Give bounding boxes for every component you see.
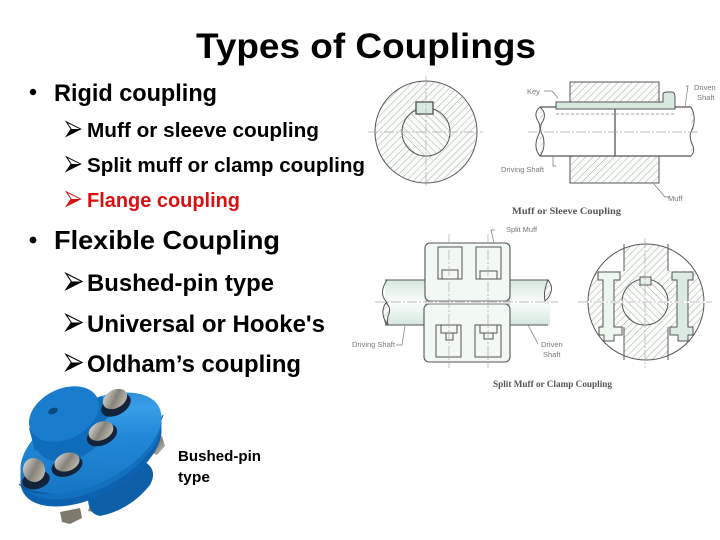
label: driven shaft: Driven: [541, 340, 563, 349]
photo label: bushed-pin type: [178, 449, 261, 486]
label: key: Key: [527, 87, 540, 96]
diagram: split muff or clamp coupling: [352, 225, 712, 390]
label: driving shaft: Driving Shaft: [501, 165, 545, 174]
title: Types of Couplings: [196, 26, 536, 66]
label: driven shaft: Shaft: [543, 350, 561, 359]
list item: oldham's coupling: Oldham’s coupling: [87, 351, 301, 378]
list item: universal or hooke's: Universal or Hooke's: [87, 311, 325, 338]
label: driven shaft: Shaft: [697, 93, 715, 102]
label: split muff: Split Muff: [506, 225, 538, 234]
caption: split muff or clamp coupling: Split Muff or Clamp Coupling: [493, 380, 612, 390]
photo label: bushed-pin type: Bushed-pin: [178, 449, 261, 465]
lower hub: [88, 462, 153, 516]
heading: rigid coupling: Rigid coupling: [54, 81, 217, 107]
side view: [375, 234, 558, 368]
text block: coupling types: [30, 81, 365, 378]
list item: bushed-pin type: Bushed-pin type: [87, 270, 274, 297]
list item: split muff or clamp coupling: Split muff or clamp coupling: [87, 155, 365, 177]
section view: [528, 82, 700, 197]
upper bolts: [20, 385, 135, 492]
flange discs: [4, 372, 178, 527]
photo: bushed-pin coupling: [4, 372, 178, 527]
end view: [368, 76, 483, 187]
label: driven shaft: Driven: [694, 83, 716, 92]
photo label: bushed-pin type: type: [178, 470, 210, 486]
label: muff: Muff: [668, 194, 683, 203]
label: driving shaft: Driving Shaft: [352, 340, 396, 349]
upper hub: [20, 375, 115, 473]
end view: [578, 238, 712, 368]
caption: muff or sleeve coupling: Muff or Sleeve Coupling: [512, 207, 621, 217]
lower bolts: [60, 436, 165, 524]
list item: muff or sleeve coupling: Muff or sleeve coupling: [87, 120, 319, 142]
list item: flange coupling: Flange coupling: [87, 190, 240, 212]
heading: flexible coupling: Flexible Coupling: [54, 225, 280, 255]
diagram: muff or sleeve coupling: [368, 76, 716, 217]
